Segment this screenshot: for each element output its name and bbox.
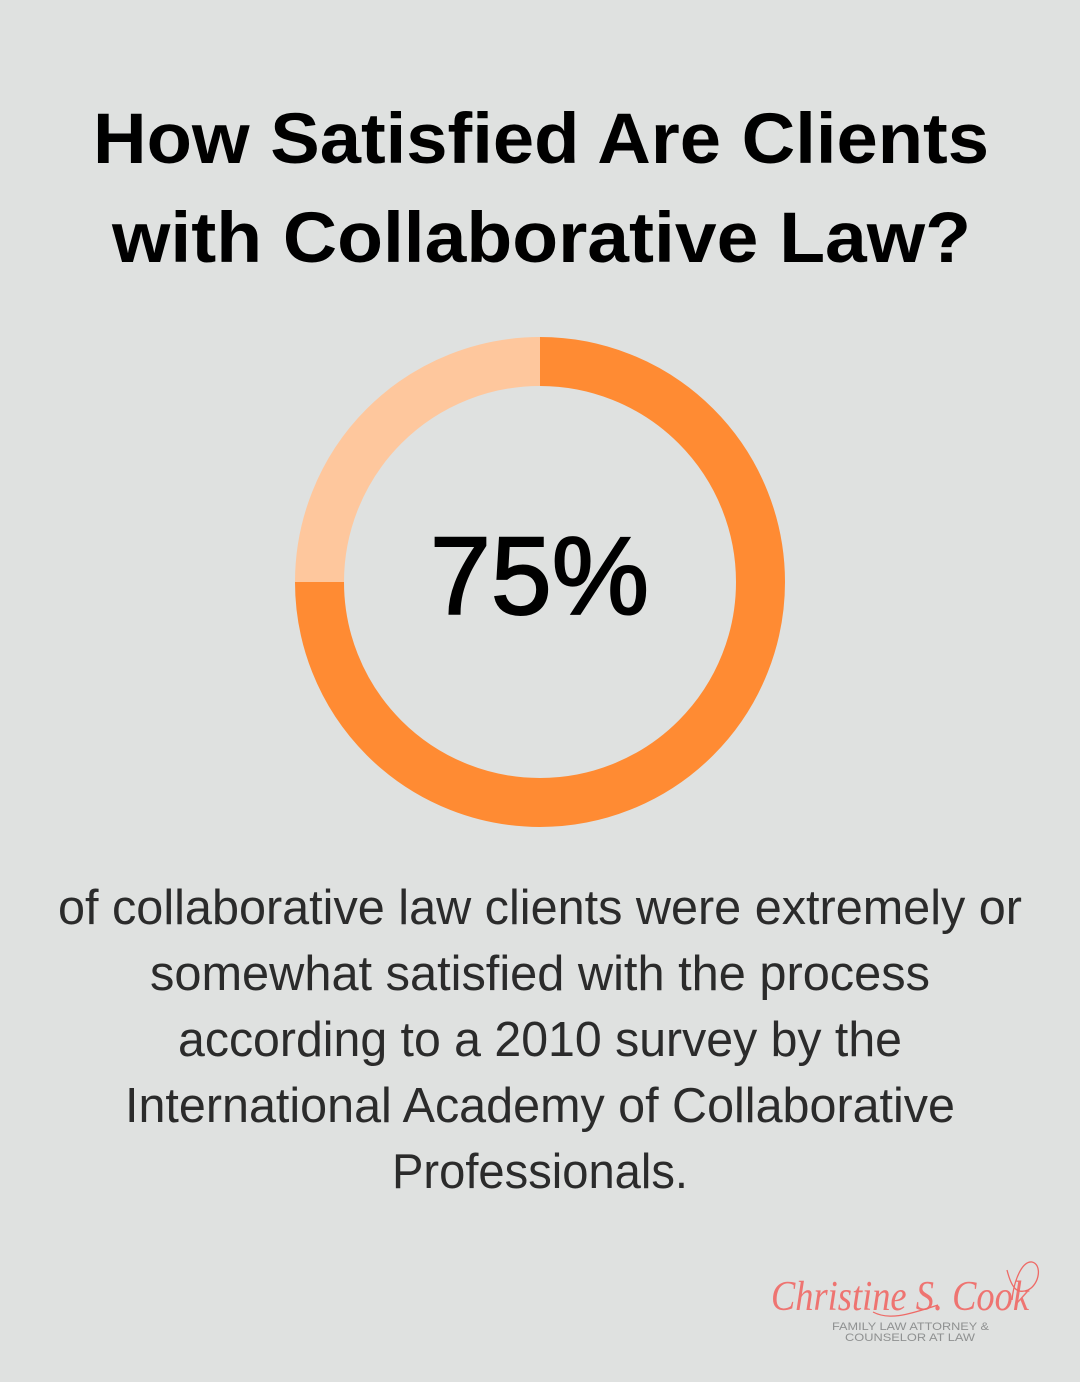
logo swash (873, 1305, 938, 1316)
logo signature name: Christine S. Cook (771, 1274, 1030, 1320)
logo tagline (832, 1321, 990, 1344)
big number: 75%: 75% (430, 515, 649, 638)
logo tagline: FAMILY LAW ATTORNEY & (832, 1321, 990, 1333)
donut chart: 75% (320, 362, 760, 802)
logo k loop flourish (1007, 1262, 1038, 1300)
remaining 25% segment (320, 362, 540, 582)
description text: according to a 2010 survey by the (178, 1013, 902, 1067)
title: How Satisfied Are Clients (93, 100, 989, 179)
description text: International Academy of Collaborative (125, 1079, 955, 1133)
description text: of collaborative law clients were extremely or (58, 881, 1022, 935)
description text: Professionals. (392, 1145, 688, 1199)
highlighted 75% segment (320, 362, 760, 802)
description text: somewhat satisfied with the process (150, 947, 930, 1001)
title: with Collaborative Law? (111, 199, 971, 278)
description text (58, 881, 1022, 1199)
logo: Christine S. Cook (771, 1262, 1038, 1344)
title (93, 100, 989, 278)
logo tagline: COUNSELOR AT LAW (845, 1332, 976, 1344)
